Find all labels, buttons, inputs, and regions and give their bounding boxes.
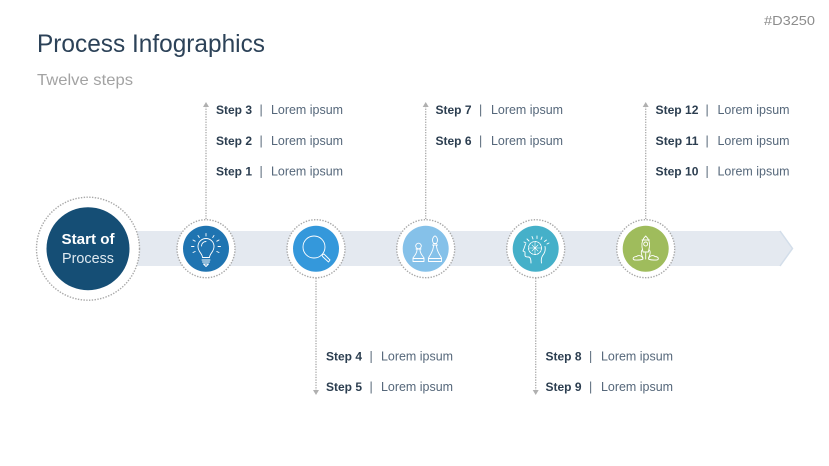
icon: chess pieces [413,236,442,262]
arrow bar [120,231,792,266]
steps 8, 9 [546,350,673,394]
steps 8, 9: Lorem ipsum [601,350,673,364]
steps 12, 11, 10: | [706,134,709,148]
steps 7, 6: Lorem ipsum [491,134,563,148]
node 3: chess pieces [397,220,455,278]
steps 4, 5 [326,350,453,394]
node 1: light bulb [177,220,235,278]
connector down: node 4 [533,278,539,395]
start of process node: Start of [62,232,115,248]
steps 12, 11, 10: Lorem ipsum [718,134,790,148]
steps 12, 11, 10: Step 10 [656,164,699,178]
node 2: magnifier [287,220,345,278]
steps 3, 2, 1: Lorem ipsum [271,134,343,148]
steps 8, 9: Step 9 [546,380,582,394]
icon: rocket [633,236,658,260]
steps 3, 2, 1: | [260,164,263,178]
node 5: rocket [617,220,675,278]
start of process node [36,197,140,300]
icon: head with brain [523,236,549,263]
steps 8, 9: Lorem ipsum [601,380,673,394]
steps 12, 11, 10: Lorem ipsum [718,103,790,117]
connector up: node 1 [203,102,209,219]
steps 4, 5: Lorem ipsum [381,380,453,394]
steps 4, 5: | [370,350,373,364]
steps 8, 9: | [589,380,592,394]
steps 7, 6: | [479,103,482,117]
icon: light bulb [192,234,220,266]
icon: magnifying glass [303,236,330,262]
title: Process Infographics [37,30,265,58]
steps 12, 11, 10: Step 11 [656,134,699,148]
steps 12, 11, 10: | [706,103,709,117]
steps 4, 5: Step 5 [326,380,362,394]
steps 12, 11, 10: | [706,164,709,178]
steps 8, 9: | [589,350,592,364]
reference code: #D3250 [764,14,815,28]
connector up: node 5 [643,102,649,219]
steps 4, 5: | [370,380,373,394]
steps 12, 11, 10: Step 12 [656,103,699,117]
steps 3, 2, 1: | [260,103,263,117]
steps 3, 2, 1 [216,103,343,178]
steps 3, 2, 1: Lorem ipsum [271,103,343,117]
connector down: node 2 [313,278,319,395]
steps 7, 6: Step 6 [436,134,472,148]
steps 3, 2, 1: Lorem ipsum [271,164,343,178]
steps 12, 11, 10 [656,103,790,178]
steps 7, 6: Step 7 [436,103,472,117]
steps 7, 6: | [479,134,482,148]
steps 3, 2, 1: Step 3 [216,103,252,117]
steps 3, 2, 1: | [260,134,263,148]
steps 8, 9: Step 8 [546,350,582,364]
steps 4, 5: Step 4 [326,350,362,364]
start of process node: Process [62,251,114,267]
steps 7, 6: Lorem ipsum [491,103,563,117]
connector up: node 3 [423,102,429,219]
steps 7, 6 [436,103,563,148]
node 4: head with brain [507,220,565,278]
steps 12, 11, 10: Lorem ipsum [718,164,790,178]
steps 4, 5: Lorem ipsum [381,350,453,364]
subtitle: Twelve steps [37,72,133,89]
steps 3, 2, 1: Step 1 [216,164,252,178]
steps 3, 2, 1: Step 2 [216,134,252,148]
